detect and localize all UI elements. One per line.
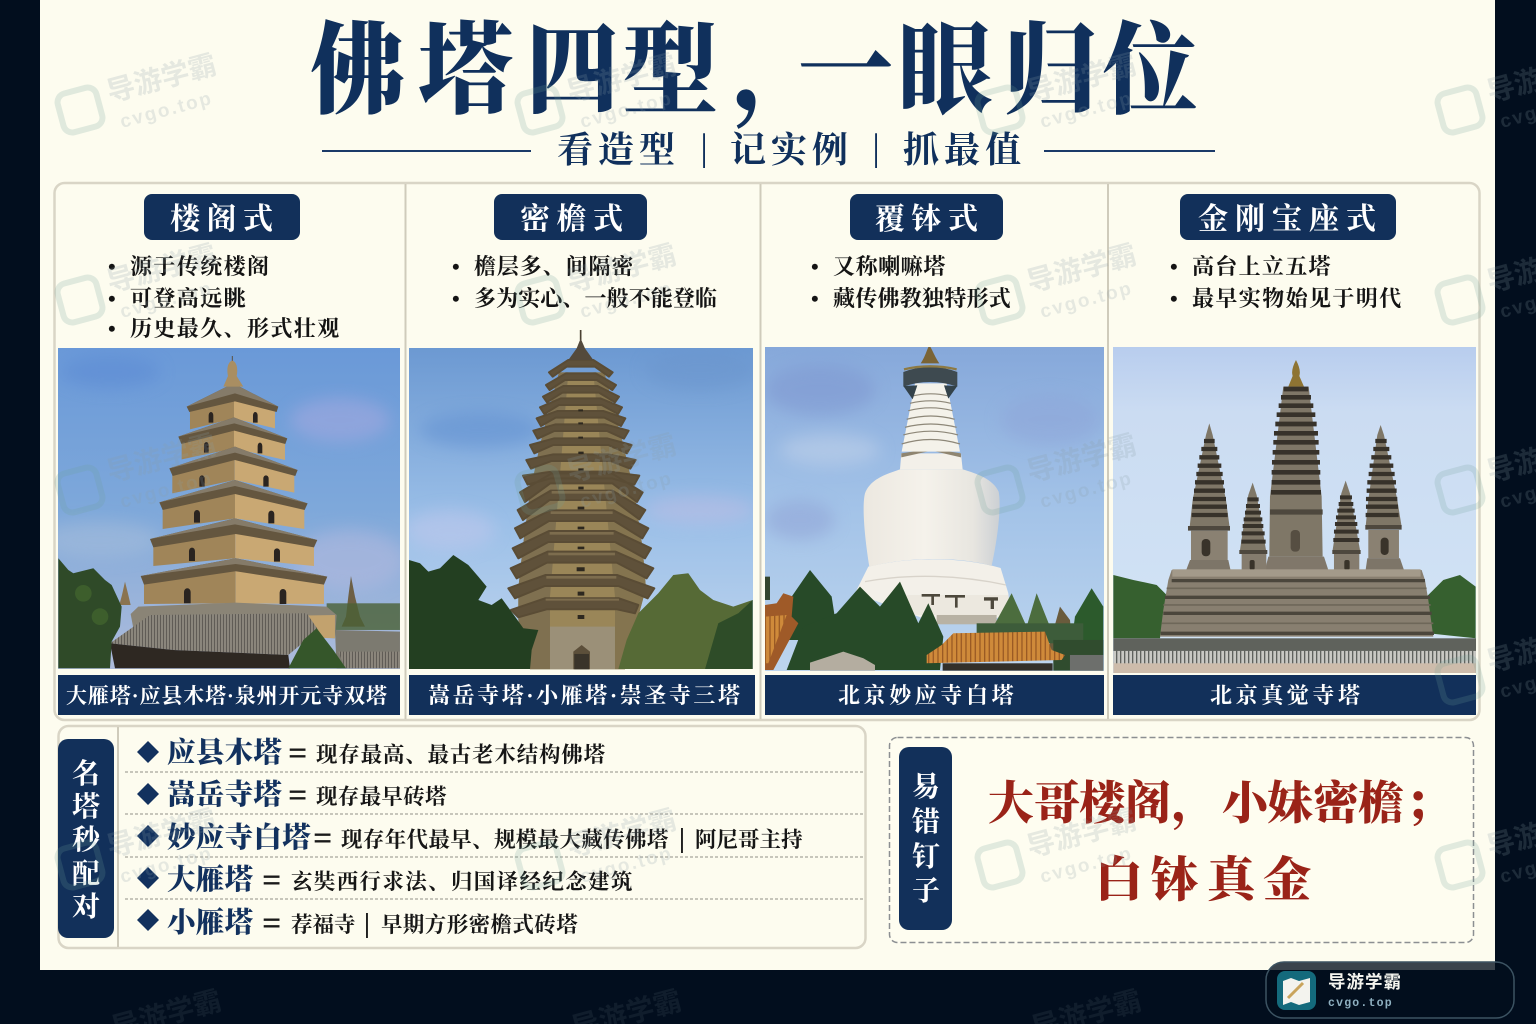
row: 妙应寺白塔: | — [679, 823, 685, 853]
row: 大雁塔: 玄奘西行求法、归国译经纪念建筑 — [291, 869, 634, 894]
panel: four pagoda types — [40, 183, 1480, 720]
subtitle with rules: 记实例 — [730, 130, 853, 170]
row: 嵩岳寺塔: = — [288, 777, 307, 814]
bullet list: 楼阁式: • — [108, 316, 116, 341]
watermark layer: cvgo.top — [578, 843, 675, 888]
row: 妙应寺白塔: = — [313, 820, 332, 857]
column: 密檐式 — [405, 194, 755, 715]
watermark layer: cvgo.top — [578, 88, 675, 133]
watermark layer: cvgo.top — [578, 278, 675, 323]
row: 妙应寺白塔 — [137, 820, 803, 857]
mnemonic line 2: 白钵真金 — [1095, 854, 1319, 907]
row: 小雁塔: 小雁塔 — [167, 906, 254, 939]
watermark layer: cvgo.top — [118, 843, 215, 888]
caption: 金刚宝座式 example: 北京真觉寺塔 — [1210, 683, 1364, 708]
watermark layer: cvgo.top — [118, 88, 215, 133]
panel: famous pagoda quick match — [58, 726, 866, 948]
column: 楼阁式 — [40, 194, 405, 715]
bullet list: 楼阁式: • — [108, 286, 116, 311]
row: 大雁塔 — [137, 862, 634, 899]
bullet list: 密檐式: • — [452, 254, 460, 279]
watermark layer: 导游学霸 — [1024, 804, 1140, 863]
watermark layer: 导游学霸 — [564, 49, 680, 108]
mnemonic line 1: 大哥楼阁，小妹密檐； — [988, 778, 1451, 831]
watermark layer: 导游学霸 — [1024, 429, 1140, 488]
bullet list: 覆钵式: 又称喇嘛塔 — [833, 254, 946, 279]
row: 小雁塔: = — [262, 905, 281, 942]
watermark layer: cvgo.top — [1038, 88, 1135, 133]
bullet list: 楼阁式: 可登高远眺 — [130, 286, 248, 311]
watermark layer: cvgo.top — [118, 468, 215, 513]
subtitle with rules: | — [700, 127, 708, 169]
label: 易错钉子: 易错钉子 — [912, 771, 940, 907]
brand badge: cvgo.top — [1328, 997, 1393, 1010]
bullet list: 覆钵式 — [811, 254, 1011, 311]
bullet list: 密檐式: • — [452, 286, 460, 311]
watermark layer: 导游学霸 — [104, 239, 220, 298]
watermark layer: 导游学霸 — [1024, 49, 1140, 108]
caption: 覆钵式 example — [765, 675, 1104, 715]
row: 妙应寺白塔: 现存年代最早、规模最大藏传佛塔 — [341, 827, 669, 852]
row: 应县木塔 — [137, 735, 606, 772]
row: 小雁塔: 早期方形密檐式砖塔 — [381, 913, 578, 937]
badge: 覆钵式 — [850, 194, 1003, 240]
row: 大雁塔: = — [262, 862, 281, 899]
subtitle with rules — [322, 127, 1215, 170]
bullet list: 密檐式: 檐层多、间隔密 — [474, 254, 634, 279]
watermark layer: cvgo.top — [1038, 278, 1135, 323]
column: 金刚宝座式 — [1113, 194, 1477, 715]
subtitle with rules: 抓最值 — [903, 130, 1026, 170]
row: 嵩岳寺塔 — [137, 777, 447, 814]
label: 名塔秒配对 — [58, 739, 114, 938]
photo: pavilion pagoda — [40, 348, 405, 669]
badge: 金刚宝座式: 金刚宝座式 — [1198, 203, 1383, 236]
bullet list: 金刚宝座式: • — [1170, 286, 1178, 311]
watermark layer: 导游学霸 — [564, 804, 680, 863]
column: 覆钵式 — [765, 194, 1104, 715]
brand badge: 导游学霸 — [1328, 972, 1402, 992]
badge: 楼阁式 — [144, 194, 300, 240]
row: 小雁塔: 荐福寺 — [291, 912, 356, 937]
label: 易错钉子 — [899, 747, 952, 930]
photo: stupa pagoda — [765, 345, 1104, 671]
photo: five-tower diamond-throne pagoda — [1113, 347, 1477, 673]
badge: 密檐式: 密檐式 — [520, 202, 630, 236]
bullet list: 密檐式 — [452, 254, 717, 311]
caption: 覆钵式 example: 北京妙应寺白塔 — [838, 683, 1017, 708]
bullet list: 楼阁式: 源于传统楼阁 — [130, 254, 270, 279]
bullet list: 覆钵式: • — [811, 254, 819, 279]
caption: 金刚宝座式 example — [1113, 675, 1476, 715]
row: 应县木塔: = — [288, 735, 307, 772]
bullet list: 金刚宝座式: 最早实物始见于明代 — [1192, 286, 1403, 311]
watermark layer: 导游学霸 — [104, 49, 220, 108]
panel: common mistakes mnemonic — [890, 738, 1474, 942]
watermark layer: 导游学霸 — [104, 804, 220, 863]
badge: 覆钵式: 覆钵式 — [875, 203, 984, 236]
row: 小雁塔: | — [364, 908, 370, 938]
icon: map logo — [1277, 971, 1316, 1010]
bullet list: 金刚宝座式: • — [1170, 254, 1178, 279]
row: 小雁塔 — [137, 905, 578, 942]
label: 名塔秒配对: 名塔秒配对 — [72, 758, 103, 923]
bullet list: 金刚宝座式: 高台上立五塔 — [1192, 254, 1332, 279]
bullet list: 金刚宝座式 — [1170, 254, 1403, 311]
bullet list: 密檐式: 多为实心、一般不能登临 — [474, 286, 717, 311]
watermark layer: cvgo.top — [1038, 468, 1135, 513]
row: 应县木塔: 应县木塔 — [167, 737, 282, 769]
subtitle with rules: | — [872, 127, 880, 169]
bullet list: 覆钵式: 藏传佛教独特形式 — [833, 286, 1011, 311]
bullet list: 楼阁式: 历史最久、形式壮观 — [130, 316, 341, 341]
watermark layer: 导游学霸 — [564, 429, 680, 488]
caption: 楼阁式 examples — [58, 675, 400, 715]
badge: 楼阁式: 楼阁式 — [170, 203, 280, 236]
row: 妙应寺白塔: 阿尼哥主持 — [695, 828, 803, 852]
row: 应县木塔: 现存最高、最古老木结构佛塔 — [316, 742, 606, 767]
watermark layer: 导游学霸 — [104, 429, 220, 488]
photo: dense-eave pagoda — [405, 330, 755, 669]
badge: 金刚宝座式 — [1180, 194, 1396, 240]
subtitle with rules: 看造型 — [557, 130, 680, 170]
bullet list: 覆钵式: • — [811, 286, 819, 311]
badge: 密檐式 — [494, 194, 647, 240]
bullet list: 楼阁式: • — [108, 254, 116, 279]
brand badge — [1266, 962, 1514, 1018]
row: 嵩岳寺塔: 现存最早砖塔 — [316, 785, 447, 809]
watermark layer: cvgo.top — [118, 278, 215, 323]
watermark layer: 导游学霸 — [1024, 239, 1140, 298]
caption: 密檐式 examples: 嵩岳寺塔·小雁塔·崇圣寺三塔 — [428, 683, 740, 708]
row: 妙应寺白塔: 妙应寺白塔 — [167, 821, 311, 854]
bullet list: 楼阁式 — [108, 254, 341, 341]
watermark layer: cvgo.top — [1038, 843, 1135, 888]
caption: 楼阁式 examples: 大雁塔·应县木塔·泉州开元寺双塔 — [66, 684, 387, 708]
row: 大雁塔: 大雁塔 — [167, 863, 254, 896]
watermark layer: 导游学霸 — [564, 239, 680, 298]
row: 嵩岳寺塔: 嵩岳寺塔 — [167, 778, 282, 811]
watermark layer: cvgo.top — [578, 468, 675, 513]
title: 佛塔四型，一眼归位 — [310, 17, 1198, 130]
caption: 密檐式 examples — [409, 675, 755, 715]
